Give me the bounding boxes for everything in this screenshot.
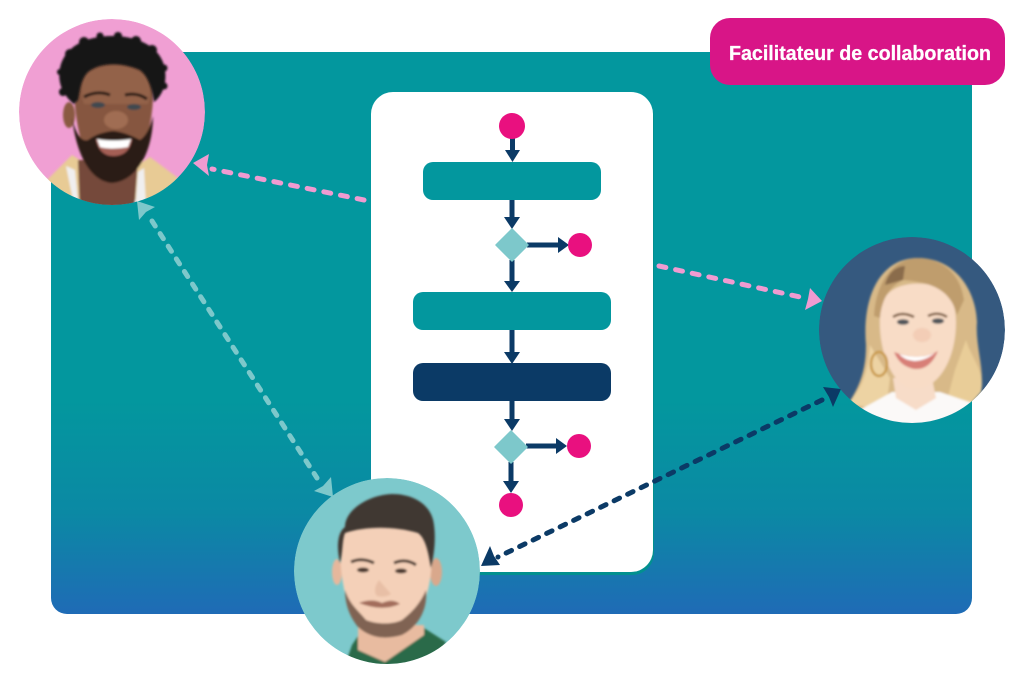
arrow: decision 2 to end 3: [503, 462, 519, 493]
end node 2: [567, 434, 591, 458]
flowchart: [413, 113, 611, 517]
decision 1: [496, 229, 528, 261]
arrow: decision 1 to end 1: [527, 237, 569, 253]
arrow: start to step 1: [505, 138, 520, 162]
arrow: man to young man, teal dashed double-headed: [137, 201, 333, 497]
arrow: decision 2 to end 2: [526, 438, 567, 454]
arrow: woman to young man, navy dashed double-headed: [481, 387, 841, 566]
arrow: flowchart to man, pink dashed: [193, 154, 364, 200]
arrow: step 3 to decision 2: [504, 401, 520, 431]
arrow: step 1 to decision 1: [504, 200, 520, 229]
portrait: young man on light teal: [294, 478, 480, 672]
end node 3: [499, 493, 523, 517]
start node: [499, 113, 525, 139]
portrait: blonde woman on navy: [819, 237, 1005, 432]
end node 1: [568, 233, 592, 257]
label: Facilitateur de collaboration: Facilitateur de collaboration: [729, 42, 991, 65]
decision 2: [495, 431, 527, 463]
portrait: smiling man on pink: [19, 19, 205, 215]
label: Facilitateur de collaboration: [710, 18, 1005, 85]
arrow: flowchart to woman, pink dashed: [659, 266, 822, 310]
step 1: [423, 162, 601, 200]
background panel: [51, 52, 972, 614]
step 3: [413, 363, 611, 401]
step 2: [413, 292, 611, 330]
arrow: decision 1 to step 2: [504, 260, 520, 292]
panel: white flowchart card: [371, 92, 654, 575]
arrow: step 2 to step 3: [504, 330, 520, 364]
